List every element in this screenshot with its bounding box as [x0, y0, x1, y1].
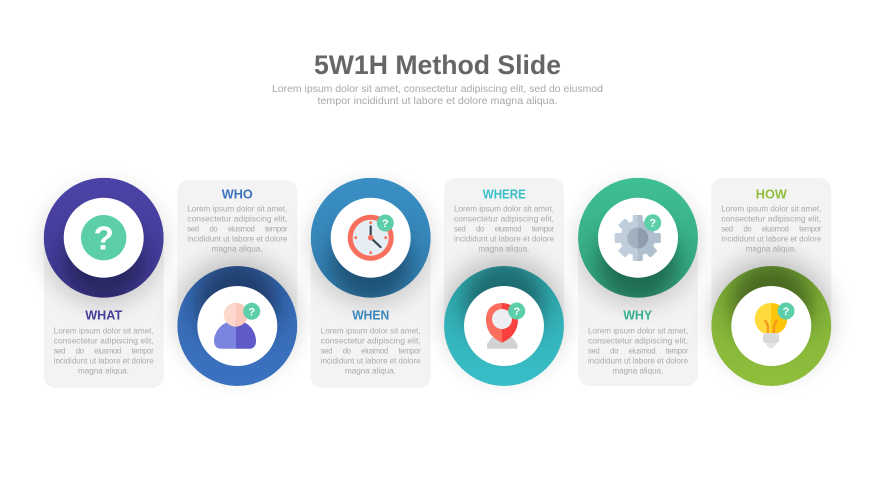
body: when: sed do eiusmod tempor — [321, 346, 421, 356]
disc: who — [197, 286, 277, 366]
subtitle: Lorem ipsum dolor sit amet, consectetur adipiscing elit, sed do eiusmod — [272, 84, 603, 95]
body: why: consectetur adipiscing elit, — [588, 336, 688, 346]
body: who: Lorem ipsum dolor sit amet, — [187, 205, 287, 214]
body: what: Lorem ipsum dolor sit amet, — [54, 326, 154, 336]
heading: what: WHAT — [85, 308, 122, 322]
heading: how: HOW — [756, 186, 788, 201]
shadow: when — [311, 186, 431, 306]
body: why: Lorem ipsum dolor sit amet, — [588, 326, 688, 336]
body: why — [588, 326, 688, 376]
heading: why: WHY — [623, 308, 653, 322]
body: when: consectetur adipiscing elit, — [321, 336, 421, 346]
panel: where — [444, 178, 564, 386]
shadow: what — [44, 186, 164, 306]
icon: person: ? — [248, 306, 255, 318]
shadow: who — [177, 256, 297, 376]
body: who: consectetur adipiscing elit, — [187, 215, 287, 224]
body: where: sed do eiusmod tempor — [454, 225, 554, 234]
panel: who — [177, 180, 297, 386]
body: how: incididunt ut labore et dolore — [721, 235, 821, 244]
icon: gear — [615, 214, 661, 261]
body: how: sed do eiusmod tempor — [721, 225, 822, 234]
body: how: consectetur adipiscing elit, — [721, 215, 821, 224]
body: why: magna aliqua. — [612, 366, 663, 376]
body: who — [187, 205, 288, 254]
body: where — [454, 205, 554, 254]
body: how: magna aliqua. — [746, 245, 797, 254]
body: when: incididunt ut labore et dolore — [321, 356, 421, 366]
heading: when: WHEN — [352, 308, 389, 322]
panel: what — [44, 178, 164, 388]
ring: who — [177, 262, 297, 386]
heading: where: WHERE — [483, 186, 526, 201]
ring: how — [711, 262, 831, 386]
shadow: how — [711, 256, 831, 376]
subtitle: tempor incididunt ut labore et dolore magna aliqua. — [318, 96, 558, 107]
body: who: incididunt ut labore et dolore — [187, 235, 287, 244]
icon: light bulb — [755, 302, 794, 348]
icon: gear: ? — [649, 218, 656, 230]
card: what — [44, 230, 164, 388]
shadow: why — [578, 186, 698, 306]
icon: question mark — [81, 215, 126, 260]
panel: how — [711, 178, 831, 386]
disc: why — [598, 198, 678, 278]
body: why: incididunt ut labore et dolore — [588, 356, 688, 366]
card: where — [444, 178, 564, 330]
icon: clock — [348, 214, 394, 261]
body: why: sed do eiusmod tempor — [588, 346, 688, 356]
body: how — [721, 205, 822, 254]
disc: where — [464, 286, 544, 366]
icon: map pin: ? — [513, 306, 520, 318]
ring: what — [44, 178, 164, 302]
ring: why — [578, 178, 698, 302]
body: what: sed do eiusmod tempor — [54, 346, 154, 356]
subtitle — [272, 84, 603, 107]
body: who: magna aliqua. — [212, 245, 263, 254]
card: when — [311, 230, 431, 388]
body: what — [54, 326, 154, 376]
body: where: magna aliqua. — [478, 245, 529, 254]
panel: why — [578, 178, 698, 386]
body: where: consectetur adipiscing elit, — [454, 215, 554, 224]
icon: light bulb: ? — [783, 306, 790, 318]
card: who — [177, 180, 297, 330]
disc: what — [64, 198, 144, 278]
ring: when — [311, 178, 431, 302]
body: when: magna aliqua. — [345, 366, 396, 376]
icon: question mark: ? — [94, 220, 114, 256]
body: how: Lorem ipsum dolor sit amet, — [721, 205, 821, 214]
icon: map pin — [486, 302, 525, 349]
heading: who: WHO — [222, 186, 253, 201]
panel: when — [311, 178, 431, 388]
card: why — [578, 230, 698, 386]
disc: how — [731, 286, 811, 366]
body: when — [321, 326, 421, 376]
body: where: Lorem ipsum dolor sit amet, — [454, 205, 554, 214]
disc: when — [331, 198, 411, 278]
body: what: incididunt ut labore et dolore — [54, 356, 154, 366]
shadow: where — [444, 256, 564, 376]
title: 5W1H Method Slide — [314, 50, 561, 80]
body: when: Lorem ipsum dolor sit amet, — [321, 326, 421, 336]
body: where: incididunt ut labore et dolore — [454, 235, 554, 244]
body: what: magna aliqua. — [78, 366, 129, 376]
card: how — [711, 178, 831, 330]
icon: person — [214, 303, 260, 349]
ring: where — [444, 262, 564, 386]
body: who: sed do eiusmod tempor — [187, 225, 288, 234]
body: what: consectetur adipiscing elit, — [54, 336, 154, 346]
icon: clock: ? — [382, 218, 389, 230]
